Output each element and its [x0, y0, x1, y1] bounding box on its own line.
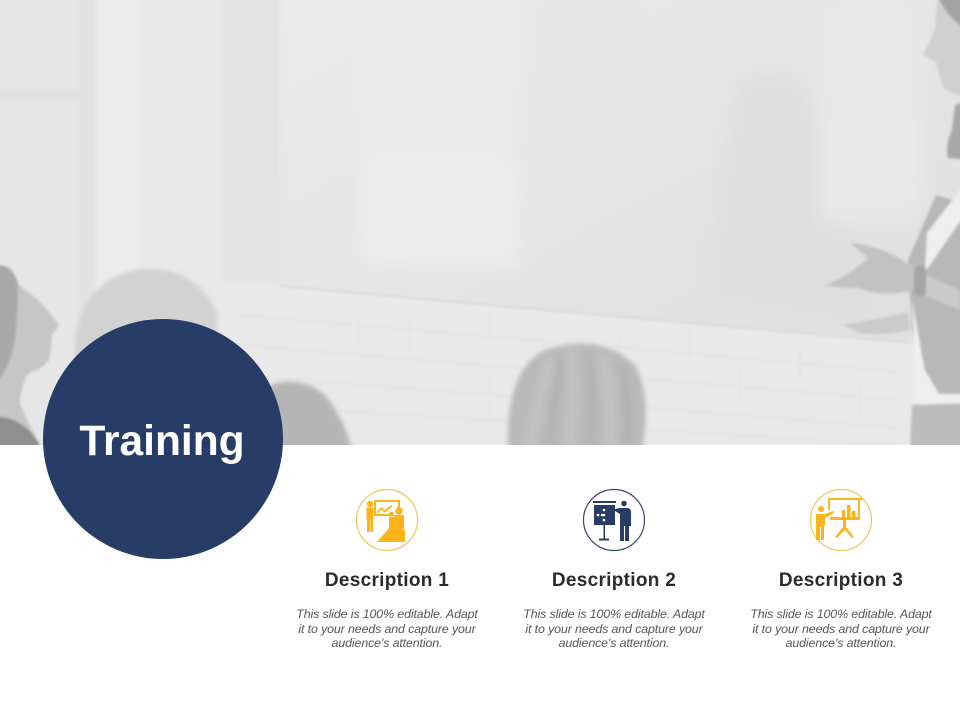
brick wall: [240, 305, 900, 445]
audience: grey-haired man: [75, 269, 218, 420]
text: description 2: [523, 607, 706, 650]
projection screen: [280, 0, 960, 345]
background photo: trainer presenting to audience: [0, 0, 960, 445]
text: description 2: This slide is 100% editable. Adapt: [523, 607, 705, 621]
heading: description 2: Description 2: [552, 570, 676, 591]
text: description 1: audience's attention.: [332, 636, 442, 650]
text: description 3: it to your needs and capture your: [752, 622, 930, 636]
text: description 3: audience's attention.: [786, 636, 896, 650]
trainer: [824, 0, 960, 450]
heading: description 3: Description 3: [779, 570, 903, 591]
text: description 1: This slide is 100% editable. Adapt: [296, 607, 478, 621]
audience: centre head: [508, 344, 646, 450]
audience: dark head behind circle: [270, 382, 352, 450]
icon: meeting presentation: [356, 488, 418, 552]
text: description 3: This slide is 100% editable. Adapt: [750, 607, 932, 621]
icon: flowchart presenter: [582, 488, 646, 552]
text: description 2: it to your needs and capture your: [525, 622, 703, 636]
title circle: [43, 319, 283, 559]
audience: woman on left: [0, 265, 59, 450]
icon: bar chart presenter: [810, 488, 872, 552]
title: Training: [79, 418, 245, 465]
text: description 3: [750, 607, 932, 650]
text: description 1: it to your needs and capture your: [298, 622, 476, 636]
text: description 2: audience's attention.: [559, 636, 669, 650]
text: description 1: [296, 607, 478, 650]
heading: description 1: Description 1: [325, 570, 449, 591]
